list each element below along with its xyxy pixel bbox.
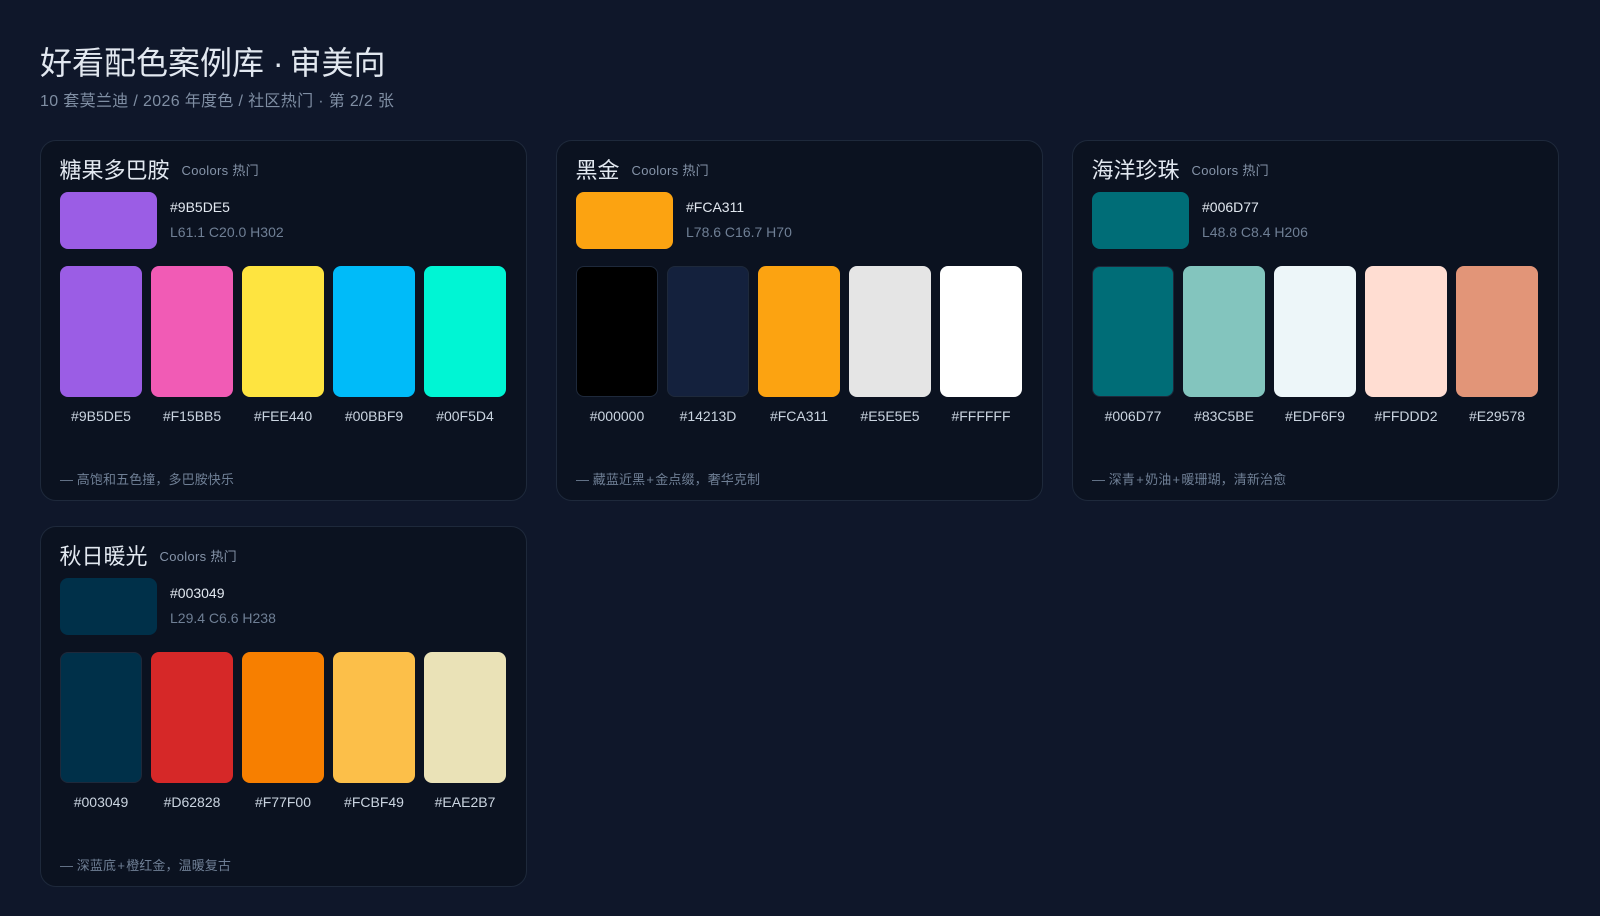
swatch 5 <box>940 266 1022 397</box>
label 1: #003049 <box>74 794 128 810</box>
card heading: 糖果多巴胺 <box>60 158 259 182</box>
LCH values: L29.4 C6.6 H238 <box>170 610 276 626</box>
note: — 深蓝底+橙红金，温暖复古 <box>60 858 231 873</box>
swatch 4 <box>849 266 931 397</box>
label 5: #E29578 <box>1469 408 1525 424</box>
card heading: 黑金: Coolors 热门 <box>632 162 709 178</box>
label 2: #D62828 <box>164 794 220 810</box>
swatch 2 <box>151 652 233 783</box>
note: — 高饱和五色撞，多巴胺快乐 <box>60 472 234 487</box>
label 5: #FFFFFF <box>951 408 1011 424</box>
swatch 3 <box>242 266 324 397</box>
main swatch <box>60 192 157 249</box>
label 4: #E5E5E5 <box>860 408 920 424</box>
subtitle: 10 套莫兰迪 / 2026 年度色 / 社区热门 · 第 2/2 张 <box>40 93 394 110</box>
LCH values: L78.6 C16.7 H70 <box>686 224 792 240</box>
swatch 2 <box>667 266 749 397</box>
label 1: #006D77 <box>1105 408 1161 424</box>
panel: 黑金 <box>556 140 1043 501</box>
note: — 藏蓝近黑+金点缀，奢华克制 <box>576 472 760 487</box>
label 3: #FEE440 <box>254 408 312 424</box>
label 4: #FFDDD2 <box>1374 408 1438 424</box>
title: 好看配色案例库 · 审美向 <box>40 45 385 81</box>
swatch 3 <box>242 652 324 783</box>
card heading: 黑金: 黑金 <box>576 158 620 182</box>
label 3: #FCA311 <box>770 408 828 424</box>
swatch 4 <box>1365 266 1447 397</box>
swatch 2 <box>1183 266 1265 397</box>
panel: 秋日暖光 <box>40 526 527 887</box>
main hex: #006D77 <box>1202 199 1259 215</box>
label 2: #14213D <box>680 408 736 424</box>
panel: 海洋珍珠 <box>1072 140 1559 501</box>
main hex: #003049 <box>170 585 225 601</box>
card heading: 海洋珍珠 <box>1092 158 1269 182</box>
LCH values: L61.1 C20.0 H302 <box>170 224 284 240</box>
swatch 3 <box>1274 266 1356 397</box>
LCH values: L48.8 C8.4 H206 <box>1202 224 1308 240</box>
card heading: 糖果多巴胺: 糖果多巴胺 <box>60 158 170 182</box>
panel: 糖果多巴胺 <box>40 140 527 501</box>
label 4: #00BBF9 <box>345 408 403 424</box>
swatch 1 <box>576 266 658 397</box>
label 1: #000000 <box>590 408 644 424</box>
swatch 4 <box>333 266 415 397</box>
card heading: 秋日暖光 <box>60 544 237 568</box>
main swatch <box>1092 192 1189 249</box>
label 3: #EDF6F9 <box>1285 408 1345 424</box>
swatch 2 <box>151 266 233 397</box>
label 4: #FCBF49 <box>344 794 404 810</box>
swatch 5 <box>424 652 506 783</box>
swatch 1 <box>1092 266 1174 397</box>
label 2: #83C5BE <box>1194 408 1254 424</box>
card heading: 黑金 <box>576 158 709 182</box>
card heading: 海洋珍珠: 海洋珍珠 <box>1092 158 1180 182</box>
note: — 深青+奶油+暖珊瑚，清新治愈 <box>1092 472 1286 487</box>
main swatch <box>60 578 157 635</box>
swatch 1 <box>60 652 142 783</box>
card heading: 秋日暖光: Coolors 热门 <box>160 548 237 564</box>
label 1: #9B5DE5 <box>71 408 131 424</box>
swatch 1 <box>60 266 142 397</box>
main hex: #9B5DE5 <box>170 199 230 215</box>
label 2: #F15BB5 <box>163 408 221 424</box>
main hex: #FCA311 <box>686 199 744 215</box>
label 5: #00F5D4 <box>436 408 494 424</box>
main swatch <box>576 192 673 249</box>
swatch 5 <box>1456 266 1538 397</box>
swatch 4 <box>333 652 415 783</box>
label 3: #F77F00 <box>255 794 311 810</box>
swatch 5 <box>424 266 506 397</box>
card heading: 海洋珍珠: Coolors 热门 <box>1192 162 1269 178</box>
swatch 3 <box>758 266 840 397</box>
card heading: 糖果多巴胺: Coolors 热门 <box>182 162 259 178</box>
card heading: 秋日暖光: 秋日暖光 <box>60 544 148 568</box>
label 5: #EAE2B7 <box>435 794 495 810</box>
